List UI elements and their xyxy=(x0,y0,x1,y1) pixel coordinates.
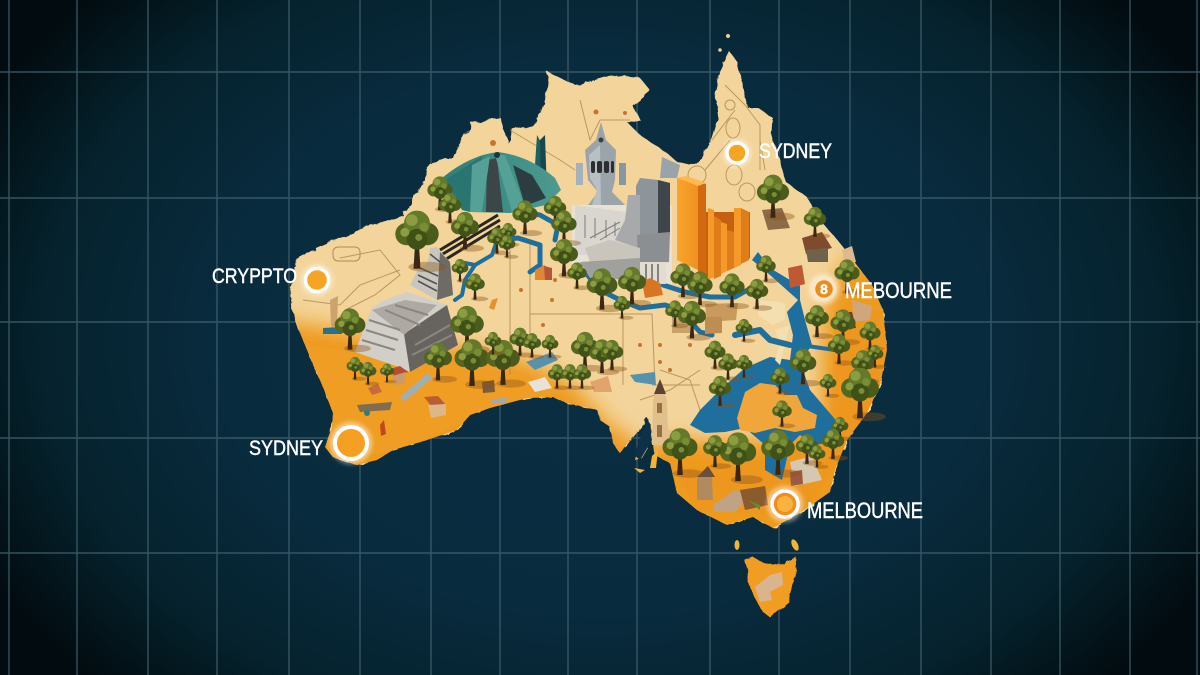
inland water and rivers xyxy=(455,208,842,480)
small terrain marks xyxy=(490,110,692,372)
marker: Melbourne: MELBOURNE xyxy=(807,498,923,523)
map of Australia xyxy=(270,34,900,617)
orange animal shapes xyxy=(489,265,663,310)
marker: Melbourne xyxy=(767,486,923,523)
teal dome building xyxy=(442,135,561,213)
marker: Mebourne: MEBOURNE xyxy=(845,278,952,303)
mainland base xyxy=(290,52,887,528)
label stamp xyxy=(333,247,360,261)
grey city block xyxy=(572,157,680,284)
stepped tower xyxy=(410,247,453,300)
marker: Sydney south xyxy=(249,422,372,464)
state borders and terrain lines xyxy=(303,85,765,410)
spencer gulf islands xyxy=(634,418,658,473)
tasmania xyxy=(744,556,797,617)
marker: Sydney north: SYDNEY xyxy=(759,140,832,163)
orange bar towers xyxy=(677,176,750,281)
ziggurat xyxy=(355,292,458,372)
marker: Mebourne xyxy=(809,274,952,304)
marker: Mebourne: 8 xyxy=(820,281,828,297)
marker: Sydney north xyxy=(723,139,832,167)
round tower xyxy=(576,122,626,205)
tasmania settlement xyxy=(755,572,783,602)
marker: Crypto: CRYPPTO xyxy=(212,265,297,288)
trees xyxy=(335,175,886,484)
marker: Sydney south: SYDNEY xyxy=(249,437,323,460)
southern village xyxy=(697,456,822,512)
marker: Crypto xyxy=(212,264,333,296)
bass strait islands xyxy=(718,34,800,552)
orange southern and eastern land xyxy=(292,247,887,528)
small cardboard boxes xyxy=(672,303,738,334)
eastern village xyxy=(762,208,872,330)
village buildings west xyxy=(323,296,612,436)
church tower xyxy=(652,379,682,445)
black stripes xyxy=(440,215,500,261)
